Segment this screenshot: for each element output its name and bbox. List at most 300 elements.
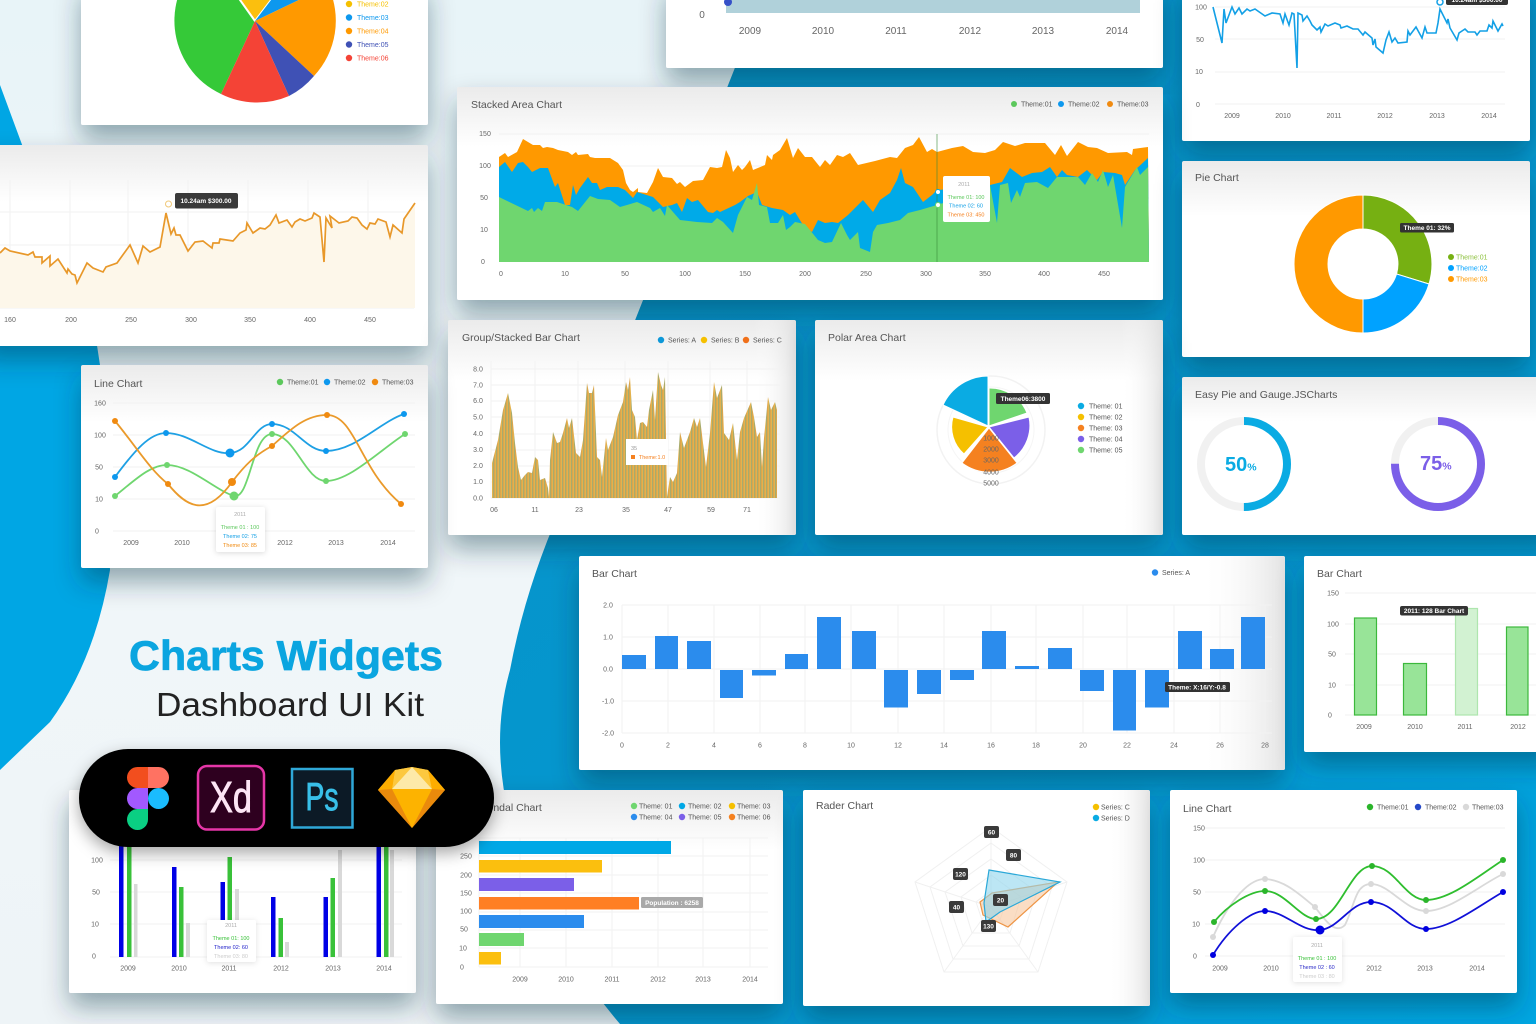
axis labels: 50 [1196, 37, 1204, 44]
legend: Theme:03 [382, 380, 414, 386]
legend [658, 337, 782, 344]
panel: wide bar chart [579, 556, 1285, 770]
axis labels: 3.0 [473, 447, 483, 454]
area: blue [499, 158, 1149, 262]
axis labels: 12 [894, 742, 902, 750]
axis labels: 2014 [1481, 113, 1497, 120]
legend: Series: A [668, 338, 696, 344]
axis labels: 2011 [221, 966, 237, 972]
axis labels: 8.0 [473, 366, 483, 374]
axis labels: 100 [1193, 858, 1205, 864]
tooltip: Theme 03: 80 [214, 954, 248, 960]
panel: radar chart [803, 790, 1150, 1006]
bars gray [134, 850, 394, 957]
legend: Theme:02 [1425, 804, 1457, 812]
gauge 75%: % [1442, 460, 1452, 472]
icon: photoshop [292, 769, 352, 828]
axis labels: 0 [1193, 954, 1197, 960]
radar grid [915, 827, 1067, 972]
legend: Theme: 01 [639, 804, 673, 810]
legend [1078, 403, 1123, 454]
axis labels: 2012 [959, 26, 982, 37]
axis labels: -1.0 [602, 698, 614, 706]
tooltip [207, 920, 256, 962]
axis labels: 2014 [376, 966, 392, 972]
legend [631, 803, 771, 822]
tooltip: 10.24am $300.00 [181, 198, 232, 205]
gauge 75%: 75 [1420, 453, 1442, 475]
axis labels: 2013 [1417, 966, 1433, 972]
legend: Theme:02 [1068, 102, 1100, 108]
panel: horizontal bar chart [436, 790, 783, 1004]
axis labels [473, 366, 751, 514]
panel: easy pie and gauge [1182, 377, 1536, 535]
axis labels: 2010 [1263, 966, 1279, 972]
axis labels: 0 [92, 954, 96, 960]
tooltip [1400, 606, 1468, 616]
heading: Group/Stacked Bar Chart [462, 332, 580, 344]
axis labels: 2010 [174, 540, 190, 547]
axis labels: 2009 [1224, 113, 1240, 120]
tooltip: Theme:1.0 [639, 455, 665, 461]
legend [1093, 804, 1130, 822]
axis labels: 100 [1195, 4, 1207, 12]
axis labels: 2011 [885, 26, 907, 37]
axis labels: 8 [803, 742, 807, 750]
axis labels [602, 602, 1269, 750]
legend: Series: B [711, 338, 740, 344]
axis labels [1192, 826, 1485, 972]
axis labels: 150 [739, 271, 751, 278]
axis labels [983, 436, 999, 488]
icon: adobe xd: Xd [210, 773, 252, 822]
axis labels: 2012 [1377, 113, 1393, 120]
axis labels: 300 [920, 271, 932, 278]
axis labels: 2012 [273, 966, 289, 972]
tooltip [1437, 0, 1508, 5]
axis labels: -2.0 [602, 730, 614, 738]
legend: Theme:01 [1456, 254, 1488, 262]
axis labels: 26 [1216, 742, 1224, 750]
area: green [499, 167, 1149, 262]
axis labels: 200 [799, 271, 811, 278]
line series [0, 203, 415, 283]
axis labels: 2011 [1326, 113, 1342, 120]
axis labels: 200 [65, 317, 77, 324]
axis labels: 50 [460, 926, 468, 934]
tooltip: Theme06:3800 [1001, 396, 1046, 403]
axis labels: 22 [1123, 742, 1131, 750]
value labels: 40 [953, 904, 960, 912]
tooltip: Theme 03: 85 [223, 543, 257, 549]
axis labels: 450 [1098, 271, 1110, 278]
legend: Theme: 04 [1089, 436, 1123, 444]
tooltip: 2011 [234, 512, 246, 518]
legend: Series: A [1162, 570, 1190, 577]
axis labels: 2009 [739, 26, 762, 37]
axis labels: 47 [664, 507, 672, 514]
polar chart [943, 376, 1030, 472]
axis labels: 2012 [650, 976, 666, 984]
tooltip: 2011: 128 Bar Chart [1404, 608, 1465, 615]
gauge 50%: 50 [1225, 454, 1247, 476]
axis labels: 14 [940, 742, 948, 750]
axis labels: 2013 [1429, 113, 1445, 120]
tooltip: Theme 03: 450 [948, 212, 984, 218]
axis labels [479, 131, 1110, 278]
tooltip [996, 393, 1050, 404]
axis labels: 2014 [380, 540, 396, 547]
axis labels: 50 [95, 464, 103, 472]
series orange [112, 412, 404, 507]
legend [1011, 101, 1149, 108]
tooltip: 2011 [225, 923, 237, 929]
panel: stacked area chart [457, 87, 1163, 300]
heading: Bar Chart [1317, 568, 1362, 580]
axis labels: 2010 [171, 966, 187, 972]
heading: Rader Chart [816, 800, 873, 812]
bars blue [119, 820, 381, 957]
axis labels: 100 [91, 858, 103, 864]
heading: Line Chart [94, 378, 143, 390]
legend: pie: Theme:05 [357, 42, 389, 49]
axis labels: 100 [1327, 622, 1339, 628]
axis labels: 50 [480, 195, 488, 202]
axis labels: 2010 [1275, 113, 1291, 120]
axis labels: 100 [460, 908, 472, 916]
legend: Theme: 01 [1089, 404, 1123, 410]
bars [1354, 608, 1528, 715]
axis labels: 59 [707, 507, 715, 514]
axis labels: 2.0 [473, 463, 483, 470]
axis labels: 10 [459, 946, 467, 952]
panel: top right line chart [1182, 0, 1530, 141]
tooltip [1293, 937, 1342, 982]
axis labels: 0.0 [473, 496, 483, 502]
axis labels: 10 [1195, 69, 1203, 76]
value labels [949, 826, 1021, 932]
bars [622, 617, 1265, 730]
heading: Stacked Area Chart [471, 99, 562, 111]
series blue [984, 870, 1060, 922]
axis labels: 250 [860, 271, 872, 278]
axis labels: 6 [758, 742, 762, 750]
axis labels: 10 [95, 496, 103, 504]
axis labels: 50 [1193, 890, 1201, 896]
axis labels [94, 400, 396, 547]
axis labels: 200 [460, 872, 472, 880]
heading: Line Chart [1183, 803, 1232, 815]
axis labels: 16 [987, 742, 995, 750]
legend: Theme:02 [334, 380, 366, 386]
legend: Theme: 03 [1089, 426, 1123, 432]
axis labels: 2012 [1366, 966, 1382, 972]
legend [1152, 569, 1190, 577]
axis labels: 250 [125, 317, 137, 324]
tooltip: Theme 03 : 80 [1299, 974, 1335, 980]
donut chart [1294, 195, 1432, 333]
axis labels: 400 [1038, 271, 1050, 278]
legend: Theme:03 [1456, 276, 1488, 284]
axis labels: 2014 [1106, 26, 1129, 37]
axis labels: 2009 [1212, 966, 1228, 972]
axis labels: 2012 [1510, 724, 1526, 731]
series green [1211, 857, 1506, 925]
tooltip [216, 507, 265, 552]
legend: pie: Theme:03 [357, 15, 389, 22]
axis labels: 50 [621, 271, 629, 278]
panel: donut pie chart [1182, 161, 1530, 357]
panel: polar area chart [815, 320, 1163, 535]
axis labels: 18 [1032, 742, 1040, 750]
panel: line chart bottom right [1170, 790, 1517, 993]
axis labels: 10 [480, 227, 488, 234]
axis labels: 450 [364, 317, 376, 324]
axis labels: 10 [847, 742, 855, 750]
legend: Theme: 02 [1089, 414, 1123, 422]
icon: adobe xd [198, 766, 264, 830]
bars [479, 841, 671, 964]
tooltip: Theme 01 : 100 [221, 525, 259, 531]
area chart remainder [726, 0, 1140, 13]
tooltip: Theme 01 : 100 [1298, 956, 1336, 962]
axis labels: 2000 [983, 446, 999, 454]
axis labels: 2011 [1457, 724, 1473, 731]
axis labels: 6.0 [473, 398, 483, 405]
axis labels: 5.0 [473, 414, 483, 422]
axis labels: 2013 [695, 976, 711, 984]
line series [1213, 7, 1503, 68]
tooltip [1400, 223, 1454, 232]
area: orange [499, 137, 1149, 262]
legend [1448, 254, 1488, 284]
subtitle: Dashboard UI Kit [156, 686, 424, 723]
axis labels: 1000 [983, 436, 999, 442]
legend: Theme:01 [1021, 102, 1053, 108]
axis labels: 250 [460, 854, 472, 860]
axis labels: 0.0 [603, 666, 613, 674]
tooltip: Theme 02: 60 [214, 945, 248, 951]
heading: Polar Area Chart [828, 332, 906, 344]
axis labels: 10 [561, 271, 569, 278]
tooltip: 35 [631, 446, 637, 452]
axis labels: 50 [92, 890, 100, 896]
axis labels: 20 [1079, 742, 1087, 750]
legend: pie: Theme:04 [357, 28, 389, 36]
axis labels: 350 [979, 271, 991, 278]
tooltip: Theme 02 : 60 [1299, 965, 1335, 971]
axis labels: 4 [712, 742, 716, 750]
panel: grouped bar chart bottom left [69, 790, 416, 993]
axis labels: 10 [1192, 922, 1200, 928]
axis labels: 2.0 [603, 602, 613, 610]
axis labels: 2 [666, 742, 670, 750]
gauge 50% [1201, 421, 1287, 507]
axis labels: 24 [1170, 742, 1178, 750]
axis labels: 4000 [983, 470, 999, 476]
legend: Theme: 06 [737, 814, 771, 822]
panel: pie chart top left [81, 0, 428, 125]
axis labels: 2013 [1032, 26, 1055, 37]
axis labels: 0 [1196, 102, 1200, 109]
axis labels: 4.0 [473, 431, 483, 438]
value labels: 60 [988, 830, 995, 836]
tooltip [936, 176, 990, 222]
axis labels: 23 [575, 507, 583, 514]
icon: sketch [378, 767, 445, 828]
axis labels: 1.0 [603, 634, 613, 642]
icon: figma [127, 767, 169, 830]
axis labels: 2013 [328, 540, 344, 547]
axis labels: 71 [743, 507, 751, 514]
axis labels: 400 [304, 317, 316, 324]
legend: Series: C [1101, 804, 1130, 812]
axis labels: 0 [499, 271, 503, 278]
axis labels: 5000 [983, 480, 999, 488]
axis labels [4, 317, 376, 324]
panel: top middle area chart [666, 0, 1163, 68]
axis labels: 0 [1328, 712, 1332, 720]
panel: small bar chart right [1304, 556, 1536, 752]
axis labels: 150 [460, 890, 472, 898]
tooltip: Theme 01: 32% [1404, 225, 1451, 232]
axis labels: 2009 [512, 976, 528, 984]
legend: Theme:03 [1472, 804, 1504, 812]
heading: Pie Chart [1195, 172, 1239, 184]
tooltip: Theme 01: 100 [212, 936, 250, 942]
panel: left orange line chart [0, 145, 428, 346]
legend: Theme: 02 [688, 804, 722, 810]
axis labels: 1.0 [473, 479, 483, 486]
axis labels: 2014 [1469, 966, 1485, 972]
axis labels: 150 [479, 131, 491, 138]
axis labels: 150 [1193, 826, 1205, 832]
axis labels: 350 [244, 317, 256, 324]
axis labels: 2012 [277, 540, 293, 547]
axis labels: 2010 [1407, 724, 1423, 731]
tool badge pill [79, 749, 494, 847]
legend: pie [346, 1, 389, 63]
bars [492, 372, 777, 498]
axis labels: 35 [622, 507, 630, 514]
heading: Horizondal Chart [463, 802, 542, 814]
value labels: 80 [1010, 852, 1017, 860]
axis labels: 50 [1328, 652, 1336, 658]
axis labels: 28 [1261, 742, 1269, 750]
axis labels: 0 [95, 528, 99, 536]
axis labels [1327, 590, 1526, 731]
tooltip: Theme 02: 75 [223, 534, 257, 540]
axis labels: 7.0 [473, 382, 483, 390]
legend: Theme: 05 [1089, 448, 1123, 454]
axis labels: 0 [460, 964, 464, 972]
tooltip [626, 439, 668, 465]
series green [112, 431, 408, 500]
legend: Series: D [1101, 816, 1130, 822]
pie chart [174, 0, 336, 103]
gauge 50%: % [1247, 462, 1257, 474]
heading: Easy Pie and Gauge.JSCharts [1195, 389, 1337, 401]
axis labels: 100 [679, 271, 691, 278]
axis labels: 2014 [742, 976, 758, 984]
legend: Theme:01 [287, 380, 319, 386]
axis labels: 150 [1327, 590, 1339, 598]
legend: pie: Theme:02 [357, 2, 389, 8]
tooltip: Population : 6258 [645, 900, 699, 907]
tooltip [1165, 682, 1230, 692]
axis labels: 0 [699, 10, 705, 21]
series gray [1210, 871, 1506, 940]
axis labels: 2009 [120, 966, 136, 972]
heading: Bar Chart [592, 568, 637, 580]
axis labels: 06 [490, 507, 498, 514]
value labels: 20 [997, 898, 1004, 904]
axis labels: 100 [94, 432, 106, 440]
value labels: 130 [983, 924, 994, 930]
axis labels [699, 10, 1129, 37]
axis labels: 2010 [558, 976, 574, 984]
tooltip: Theme 01: 100 [948, 195, 984, 201]
legend: Series: C [753, 338, 782, 344]
axis labels: 160 [4, 317, 16, 324]
gauge 75% [1395, 421, 1481, 507]
tooltip: 2011 [1311, 943, 1323, 949]
axis labels: 300 [185, 317, 197, 324]
panel: group stacked bar chart [448, 320, 796, 535]
series blue [112, 411, 407, 480]
legend: Theme: 04 [639, 814, 673, 822]
axis labels: 2011 [604, 976, 620, 984]
axis labels: 2013 [325, 966, 341, 972]
axis labels: 10 [91, 922, 99, 928]
panel: line chart left [81, 365, 428, 568]
axis labels [1195, 4, 1497, 120]
legend: Theme:02 [1456, 266, 1488, 272]
tooltip: Theme 02: 60 [949, 204, 983, 210]
axis labels [91, 858, 392, 972]
legend [277, 379, 414, 386]
icon: photoshop: Ps [306, 776, 338, 819]
axis labels: 2009 [1356, 724, 1372, 731]
legend: Theme:03 [1117, 102, 1149, 108]
tooltip: Theme: X:16/Y:-0.8 [1168, 684, 1226, 692]
legend: Theme: 03 [737, 804, 771, 810]
series blue [1210, 889, 1506, 958]
tooltip [166, 193, 238, 208]
axis labels: 3000 [983, 458, 999, 464]
title: Charts Widgets [129, 632, 443, 679]
axis labels: 100 [479, 163, 491, 170]
tooltip [641, 897, 703, 908]
series orange [980, 882, 1058, 927]
axis labels: 11 [531, 507, 539, 514]
tooltip: 2011 [958, 182, 970, 188]
axis labels: 10 [1328, 682, 1336, 690]
legend: pie: Theme:06 [357, 56, 389, 62]
value labels: 120 [955, 872, 966, 878]
legend: Theme:01 [1377, 804, 1409, 812]
axis labels: 0 [481, 259, 485, 266]
axis labels: 0 [620, 742, 624, 750]
axis labels [459, 854, 758, 984]
axis labels: 160 [94, 400, 106, 408]
axis labels: 2010 [812, 26, 835, 37]
bars green [127, 820, 388, 957]
area fill [0, 203, 415, 308]
legend: Theme: 05 [688, 814, 722, 822]
legend [1367, 804, 1504, 812]
axis labels: 2009 [123, 540, 139, 547]
